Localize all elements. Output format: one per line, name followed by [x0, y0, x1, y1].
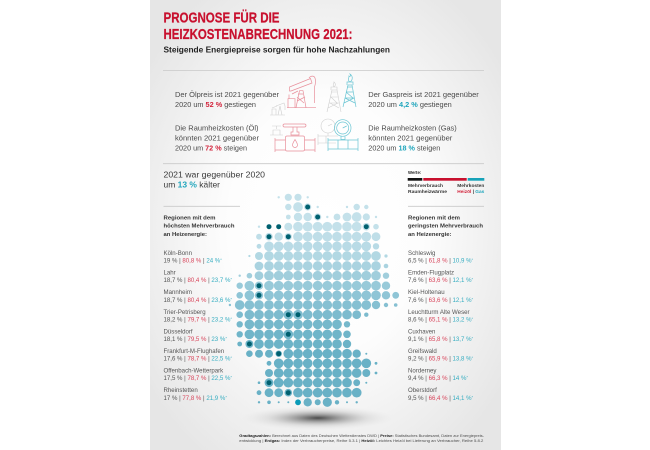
footnote sources	[239, 433, 485, 443]
list: highest regions: Rheinstetten	[164, 387, 198, 394]
list: lowest regions	[408, 250, 474, 402]
heading: regions lowest: geringsten Mehrverbrauch	[408, 224, 483, 230]
icon: grey gauge	[318, 119, 338, 145]
list: lowest regions: *	[472, 277, 474, 282]
list: lowest regions: *	[472, 296, 474, 301]
list: highest regions: Lahr	[164, 270, 176, 277]
footnote sources: Gradtagszahlen: Berechnet aus Daten des Deutschen Wetterdienstes DWD | Preise: Statistisches Bundesamt, Daten zur Energiepreis-	[239, 433, 485, 438]
list: highest regions: 17,5 % | 78,7 % | 22,5 %	[164, 375, 230, 382]
list: highest regions: Offenbach-Wetterpark	[164, 368, 224, 375]
list: lowest regions: *	[472, 394, 474, 399]
icon: red oil pump	[287, 76, 316, 108]
text block: oil price: 2020 um 52 % gestiegen	[175, 100, 256, 109]
heading: regions highest: an Heizenergie:	[164, 232, 207, 238]
list: highest regions: *	[230, 277, 232, 282]
text block: gas price: 2020 um 4,2 % gestiegen	[368, 100, 452, 109]
text block: room heating cost oil: könnten 2021 gegenüber	[175, 133, 260, 142]
text block: gas price	[368, 90, 479, 109]
list: lowest regions: Greifswald	[408, 348, 437, 355]
text block: gas price: Der Gaspreis ist 2021 gegenüber	[368, 90, 479, 99]
heading: colder year	[164, 169, 265, 189]
legend: Raumheizwärme	[408, 189, 448, 194]
list: lowest regions: Emden-Flugplatz	[408, 270, 454, 277]
heading: regions highest: höchsten Mehrverbrauch	[164, 224, 235, 230]
heading: regions highest	[164, 216, 235, 238]
heading: regions lowest	[408, 216, 483, 238]
list: lowest regions: *	[472, 257, 474, 262]
legend: Heizöl | Gas	[457, 189, 485, 194]
dark station markers	[247, 204, 369, 395]
text block: room heating cost oil: Die Raumheizkosten (Öl)	[175, 123, 258, 132]
list: highest regions: Mannheim	[164, 289, 192, 296]
text block: room heating cost oil	[175, 123, 260, 152]
list: lowest regions: *	[466, 375, 468, 380]
list: highest regions: Köln-Bonn	[164, 250, 192, 257]
list: lowest regions: *	[472, 336, 474, 340]
list: highest regions: *	[220, 257, 222, 262]
map shadow	[242, 406, 394, 430]
legend: Mehrkosten	[457, 183, 485, 188]
list: highest regions: 18,7 % | 80,4 % | 23,6 %	[164, 297, 230, 304]
heading: regions lowest: an Heizenergie:	[408, 232, 452, 238]
list: lowest regions: 8,6 % | 65,1 % | 13,2 %	[408, 316, 472, 323]
dot map of Germany	[229, 194, 399, 407]
list: lowest regions: 7,6 % | 63,6 % | 12,1 %	[408, 297, 472, 304]
title: HEIZKOSTENABRECHNUNG 2021:	[164, 26, 352, 43]
list: lowest regions: Cuxhaven	[408, 328, 435, 335]
list: highest regions: 17 % | 77,8 % | 21,9 %	[164, 395, 225, 402]
icon: red valve	[275, 124, 315, 152]
icon: small grey oil pump	[270, 103, 285, 115]
list: highest regions	[164, 250, 232, 402]
list: highest regions: 18,1 % | 79,5 % | 23 %	[164, 336, 225, 343]
heading: colder year: um 13 % kälter	[164, 179, 220, 189]
text block: room heating cost gas	[368, 123, 457, 152]
list: lowest regions: *	[472, 316, 474, 321]
list: highest regions: Frankfurt-M-Flughafen	[164, 348, 224, 355]
list: lowest regions: 9,5 % | 66,4 % | 14,1 %	[408, 395, 472, 402]
list: highest regions: *	[230, 296, 232, 301]
text block: room heating cost gas: 2020 um 18 % steigen	[368, 143, 440, 152]
list: highest regions: *	[225, 394, 227, 399]
list: lowest regions: 9,2 % | 65,9 % | 13,8 %	[408, 356, 472, 363]
list: lowest regions: 9,4 % | 66,3 % | 14 %	[408, 375, 466, 382]
legend: Mehrverbrauch	[408, 183, 443, 188]
subtitle: Steigende Energiepreise sorgen für hohe Nachzahlungen	[164, 45, 390, 54]
list: highest regions: Trier-Petrisberg	[164, 309, 206, 316]
list: highest regions: 19 % | 80,8 % | 24 %	[164, 258, 220, 265]
icon: teal gauge	[328, 120, 358, 151]
list: lowest regions: 9,1 % | 65,8 % | 13,7 %	[408, 336, 472, 343]
icon: grey gas derrick	[327, 82, 341, 112]
list: lowest regions: Kiel-Holtenau	[408, 289, 445, 296]
text block: oil price	[175, 90, 280, 109]
list: highest regions: Düsseldorf	[164, 328, 193, 335]
text block: room heating cost gas: Die Raumheizkosten (Gas)	[368, 123, 457, 132]
list: highest regions: *	[230, 375, 232, 380]
heading: regions lowest: Regionen mit dem	[408, 216, 460, 222]
list: highest regions: *	[225, 336, 227, 340]
list: lowest regions: Schleswig	[408, 250, 435, 257]
heading: regions highest: Regionen mit dem	[164, 216, 216, 222]
legend	[408, 170, 485, 194]
text block: room heating cost oil: 2020 um 72 % steigen	[175, 143, 247, 152]
list: highest regions: *	[230, 355, 232, 360]
heading: colder year: 2021 war gegenüber 2020	[164, 169, 265, 179]
panel: background	[150, 0, 501, 450]
icon: teal gas derrick	[343, 74, 356, 107]
list: highest regions: 17,6 % | 78,7 % | 22,5 %	[164, 356, 230, 363]
text block: oil price: Der Ölpreis ist 2021 gegenüber	[175, 90, 280, 99]
list: lowest regions: Leuchtturm Alte Weser	[408, 309, 470, 316]
list: lowest regions: Norderney	[408, 368, 437, 375]
title: PROGNOSE FÜR DIE	[164, 10, 280, 26]
list: lowest regions: *	[472, 355, 474, 360]
list: lowest regions: Oberstdorf	[408, 387, 437, 394]
list: lowest regions: 7,6 % | 63,6 % | 12,1 %	[408, 277, 472, 284]
legend: Werte:	[408, 170, 422, 175]
list: highest regions: *	[230, 316, 232, 321]
text block: room heating cost gas: könnten 2021 gegenüber	[368, 133, 453, 142]
footnote sources: entwicklung | Erdgas: Index der Verbraucherpreise, Reihe 5.3.1 | Heizöl: Leichtes Heizöl bei Lieferung an Verbraucher, Reihe 5.8.2	[239, 438, 483, 443]
list: lowest regions: 6,5 % | 61,8 % | 10,9 %	[408, 258, 472, 265]
title	[164, 10, 352, 43]
list: highest regions: 18,2 % | 79,7 % | 23,2 %	[164, 316, 230, 323]
icon: grey small valve	[270, 126, 283, 135]
list: highest regions: 18,7 % | 80,4 % | 23,7 %	[164, 277, 230, 284]
